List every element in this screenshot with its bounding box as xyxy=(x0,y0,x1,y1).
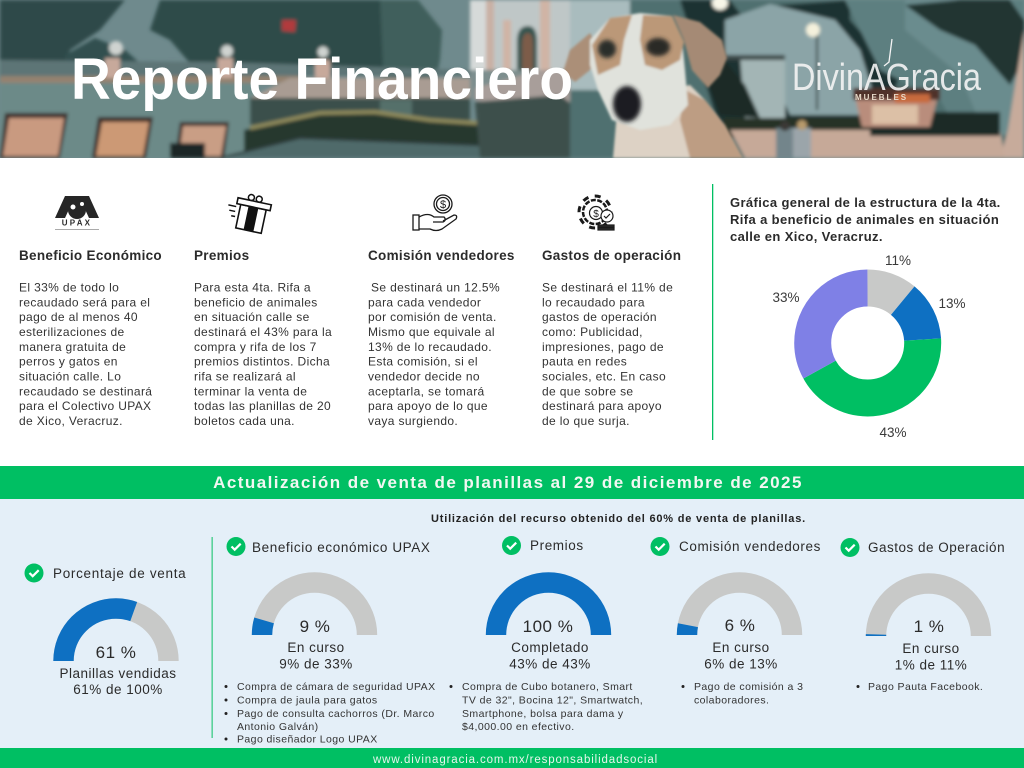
right side building xyxy=(570,0,1024,158)
logo: DivinaGracia xyxy=(792,39,982,99)
left windows xyxy=(0,113,68,158)
text block: vaya surgiendo. xyxy=(368,414,458,428)
text block: compra y rifa de los 7 xyxy=(194,340,317,354)
expense list: Pago Pauta Facebook. xyxy=(868,681,983,693)
icon: UPAX logo xyxy=(55,196,99,230)
expense list: Compra de jaula para gatos xyxy=(237,694,378,706)
text block: para el Colectivo UPAX xyxy=(19,399,151,413)
text block: Se destinará un 12.5% xyxy=(371,280,500,294)
text block: sociales, etc. En caso xyxy=(542,369,666,383)
gauge xyxy=(496,583,601,635)
gauge xyxy=(262,583,367,635)
caption: 1% de 11% xyxy=(895,658,967,672)
value: 100 % xyxy=(523,617,573,636)
text block: de que sobre se xyxy=(542,384,633,398)
gauge xyxy=(64,609,168,661)
expense list xyxy=(450,681,643,733)
chart labels: 33% xyxy=(772,290,800,305)
text block: para cada vendedor xyxy=(368,295,481,309)
chart labels: 43% xyxy=(879,425,907,440)
expense list xyxy=(224,681,436,746)
heading: Comisión vendedores xyxy=(368,248,515,263)
check icon xyxy=(24,564,44,582)
text block: Se destinará el 11% de xyxy=(542,280,673,294)
gauge xyxy=(876,584,981,636)
panel: comision vendedores xyxy=(368,195,515,428)
panel: donut chart section xyxy=(730,195,1001,440)
caption: En curso xyxy=(902,641,960,656)
text block: de lo que surja. xyxy=(542,414,630,428)
text block: destinará el 43% para la xyxy=(194,325,332,339)
value: 6 % xyxy=(725,616,755,635)
chart heading: calle en Xico, Veracruz. xyxy=(730,229,883,244)
panel: premios xyxy=(194,190,332,428)
chart labels: 13% xyxy=(938,296,966,311)
text block: como: Publicidad, xyxy=(542,325,643,339)
gauge panel: gastos de operacion xyxy=(840,538,1005,693)
value: 9 % xyxy=(300,617,330,636)
expense list: Antonio Galván) xyxy=(237,721,319,733)
chart labels: 11% xyxy=(885,253,911,268)
expense list: colaboradores. xyxy=(694,694,769,706)
donut chart xyxy=(813,288,923,398)
label: Porcentaje de venta xyxy=(53,566,186,581)
text block: beneficio de animales xyxy=(194,295,318,309)
icon: gear with money xyxy=(579,196,614,230)
gauge xyxy=(687,583,792,635)
hedge and wall xyxy=(242,113,481,152)
text block: lo recaudado para xyxy=(542,295,645,309)
value: 61 % xyxy=(96,643,136,662)
icon: hand with coin xyxy=(413,195,457,230)
text block: Esta comisión, si el xyxy=(368,355,478,369)
expense list: Pago de comisión a 3 xyxy=(694,681,803,693)
icon: UPAX logo: UPAX xyxy=(62,218,92,228)
text block: pauta en redes xyxy=(542,355,627,369)
icon: gift xyxy=(224,190,273,234)
caption: 9% de 33% xyxy=(279,656,353,672)
title: Reporte Financiero xyxy=(71,47,573,112)
text block: 13% de lo recaudado. xyxy=(368,340,492,354)
header photo: street with dog xyxy=(0,0,1024,158)
text block: aceptarla, se tomará xyxy=(368,384,485,398)
check icon xyxy=(226,537,246,556)
expense list: Pago de consulta cachorros (Dr. Marco xyxy=(237,708,435,720)
label: Beneficio económico UPAX xyxy=(252,540,430,555)
footer xyxy=(0,748,1024,768)
text block: manera gratuita de xyxy=(19,340,126,354)
gauge panel: premios xyxy=(450,536,643,733)
section band: Actualización de venta de planillas al 29 de diciembre de 2025 xyxy=(213,473,803,492)
heading: Beneficio Económico xyxy=(19,248,162,263)
caption: 61% de 100% xyxy=(73,682,163,697)
text block: impresiones, pago de xyxy=(542,340,664,354)
gauge panel: beneficio economico UPAX xyxy=(224,537,436,746)
text block: Mismo que equivale al xyxy=(368,325,495,339)
icon: hand with coin: $ xyxy=(440,199,446,211)
expense list: Smartphone, bolsa para dama y xyxy=(462,708,624,720)
caption: En curso xyxy=(287,640,345,655)
text block: situación calle. Lo xyxy=(19,369,121,383)
gauge panel: comision vendedores xyxy=(650,537,821,706)
caption: Completado xyxy=(511,640,589,655)
expense list: TV de 32", Bocina 12", Smartwatch, xyxy=(462,694,643,706)
icon: gear with money: $ xyxy=(593,209,599,220)
text block: para apoyo de lo que xyxy=(368,399,488,413)
text block: perros y gatos en xyxy=(19,355,118,369)
gauge panel: porcentaje de venta xyxy=(24,564,186,697)
caption: 43% de 43% xyxy=(509,656,591,672)
section band xyxy=(0,466,1024,499)
text block: El 33% de todo lo xyxy=(19,280,119,294)
label: Premios xyxy=(530,538,584,553)
chart heading: Gráfica general de la estructura de la 4ta. xyxy=(730,195,1001,210)
text block: vendedor decide no xyxy=(368,369,480,383)
caption: En curso xyxy=(712,640,770,655)
text block: por comisión de venta. xyxy=(368,310,497,324)
label: Comisión vendedores xyxy=(679,539,821,554)
chart labels xyxy=(772,253,966,440)
value: 1 % xyxy=(914,617,944,636)
lower panel background xyxy=(0,499,1024,748)
check icon xyxy=(840,538,860,557)
caption: Planillas vendidas xyxy=(59,666,177,681)
text block: boletos cada una. xyxy=(194,414,295,428)
header photo: street with dog: MUEBLES xyxy=(855,93,908,102)
subheading: Utilización del recurso obtenido del 60% de venta de planillas. xyxy=(431,513,806,525)
heading: Gastos de operación xyxy=(542,248,681,263)
text block: esterilizaciones de xyxy=(19,325,125,339)
check icon xyxy=(650,537,670,556)
panel: beneficio economico xyxy=(19,196,162,428)
footer: www.divinagracia.com.mx/responsabilidadsocial xyxy=(372,754,658,766)
expense list: Compra de cámara de seguridad UPAX xyxy=(237,681,436,693)
text block: Para esta 4ta. Rifa a xyxy=(194,280,311,294)
text block: terminar la venta de xyxy=(194,384,307,398)
text block: en situación calle se xyxy=(194,310,310,324)
text block: recaudado se destinará xyxy=(19,384,152,398)
text block: todas las planillas de 20 xyxy=(194,399,331,413)
expense list xyxy=(682,681,803,706)
chart heading: Rifa a beneficio de animales en situación xyxy=(730,212,999,227)
expense list: $4,000.00 en efectivo. xyxy=(462,721,575,733)
expense list: Pago diseñador Logo UPAX xyxy=(237,734,378,746)
text block: rifa se realizará al xyxy=(194,369,296,383)
heading: Premios xyxy=(194,248,249,263)
text block: premios distintos. Dicha xyxy=(194,355,330,369)
text block: gastos de operación xyxy=(542,310,657,324)
check icon xyxy=(502,536,521,555)
logo: DivinaGracia: DivinAGracia xyxy=(792,57,982,99)
caption: 6% de 13% xyxy=(704,656,778,672)
label: Gastos de Operación xyxy=(868,540,1005,555)
panel: gastos de operacion xyxy=(542,196,681,428)
text block: recaudado será para el xyxy=(19,295,150,309)
text block: pago de al menos 40 xyxy=(19,310,138,324)
expense list: Compra de Cubo botanero, Smart xyxy=(462,681,633,693)
text block: de Xico, Veracruz. xyxy=(19,414,123,428)
text block: destinará para apoyo xyxy=(542,399,662,413)
